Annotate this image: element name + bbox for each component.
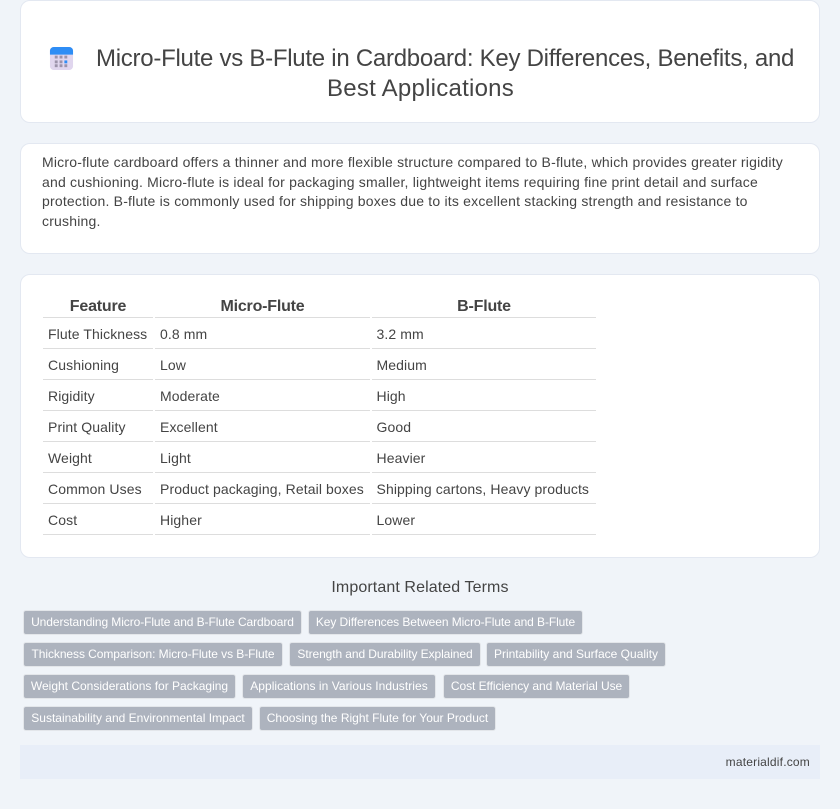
column headers [70, 298, 511, 315]
icon: calendar [50, 47, 74, 70]
table: feature comparison: Low [160, 357, 186, 373]
column headers: B-Flute [457, 298, 511, 315]
related term tags: Applications in Various Industries [250, 679, 428, 693]
table: feature comparison: Print Quality [48, 419, 126, 435]
table: feature comparison: Weight [48, 450, 92, 466]
table: feature comparison [43, 298, 596, 535]
table: feature comparison: 3.2 mm [376, 326, 424, 342]
panel: intro text [20, 143, 820, 254]
table: feature comparison: Moderate [160, 388, 220, 404]
related term tags: Key Differences Between Micro-Flute and B-Flute [316, 615, 575, 629]
related term tags: Strength and Durability Explained [297, 647, 473, 661]
intro paragraph: and cushioning. Micro-flute is ideal for packaging smaller, lightweight items requiring fine print detail and surface [42, 174, 758, 190]
table: feature comparison: Common Uses [48, 481, 142, 497]
related term tags: Thickness Comparison: Micro-Flute vs B-Flute [32, 647, 274, 661]
table: feature comparison: Lower [376, 512, 415, 528]
table: feature comparison: Excellent [160, 419, 218, 435]
related term tags: Weight Considerations for Packaging [31, 679, 228, 693]
table: feature comparison: Product packaging, Retail boxes [160, 481, 364, 497]
related term tags: Understanding Micro-Flute and B-Flute Cardboard [31, 615, 294, 629]
intro paragraph: Micro-flute cardboard offers a thinner and more flexible structure compared to B-flute, which provides greater rigidity [42, 154, 783, 170]
table: feature comparison: Medium [376, 357, 427, 373]
table: feature comparison: Higher [160, 512, 202, 528]
table: feature comparison: Cushioning [48, 357, 119, 373]
related term tags: Printability and Surface Quality [494, 647, 658, 661]
intro paragraph: protection. B-flute is commonly used for shipping boxes due to its excellent stacking strength and resistance to [42, 193, 748, 209]
table: feature comparison: Heavier [376, 450, 425, 466]
intro paragraph [42, 154, 783, 229]
intro paragraph: crushing. [42, 213, 101, 229]
table: feature comparison: High [376, 388, 406, 404]
table: feature comparison: Rigidity [48, 388, 95, 404]
related term tags: Choosing the Right Flute for Your Product [267, 711, 488, 725]
column headers: Feature [70, 298, 126, 315]
table: feature comparison: Good [376, 419, 411, 435]
heading: related terms: Important Related Terms [331, 579, 509, 596]
footer bar [20, 745, 820, 779]
related term tags: Sustainability and Environmental Impact [31, 711, 245, 725]
related term tags: Cost Efficiency and Material Use [451, 679, 622, 693]
related term tags [23, 610, 666, 731]
column headers: Micro-Flute [220, 298, 305, 315]
table: feature comparison: Flute Thickness [48, 326, 147, 342]
panel: header [20, 0, 820, 123]
title: Micro-Flute vs B-Flute in Cardboard: Key Differences, Benefits, and [96, 45, 794, 72]
footer source: materialdif.com [726, 755, 810, 769]
title: Best Applications [327, 75, 514, 102]
table: feature comparison: 0.8 mm [160, 326, 207, 342]
panel: comparison table [20, 274, 820, 558]
table: feature comparison: Light [160, 450, 191, 466]
table: feature comparison: Shipping cartons, Heavy products [376, 481, 589, 497]
table: feature comparison: Cost [48, 512, 77, 528]
title [96, 45, 794, 102]
